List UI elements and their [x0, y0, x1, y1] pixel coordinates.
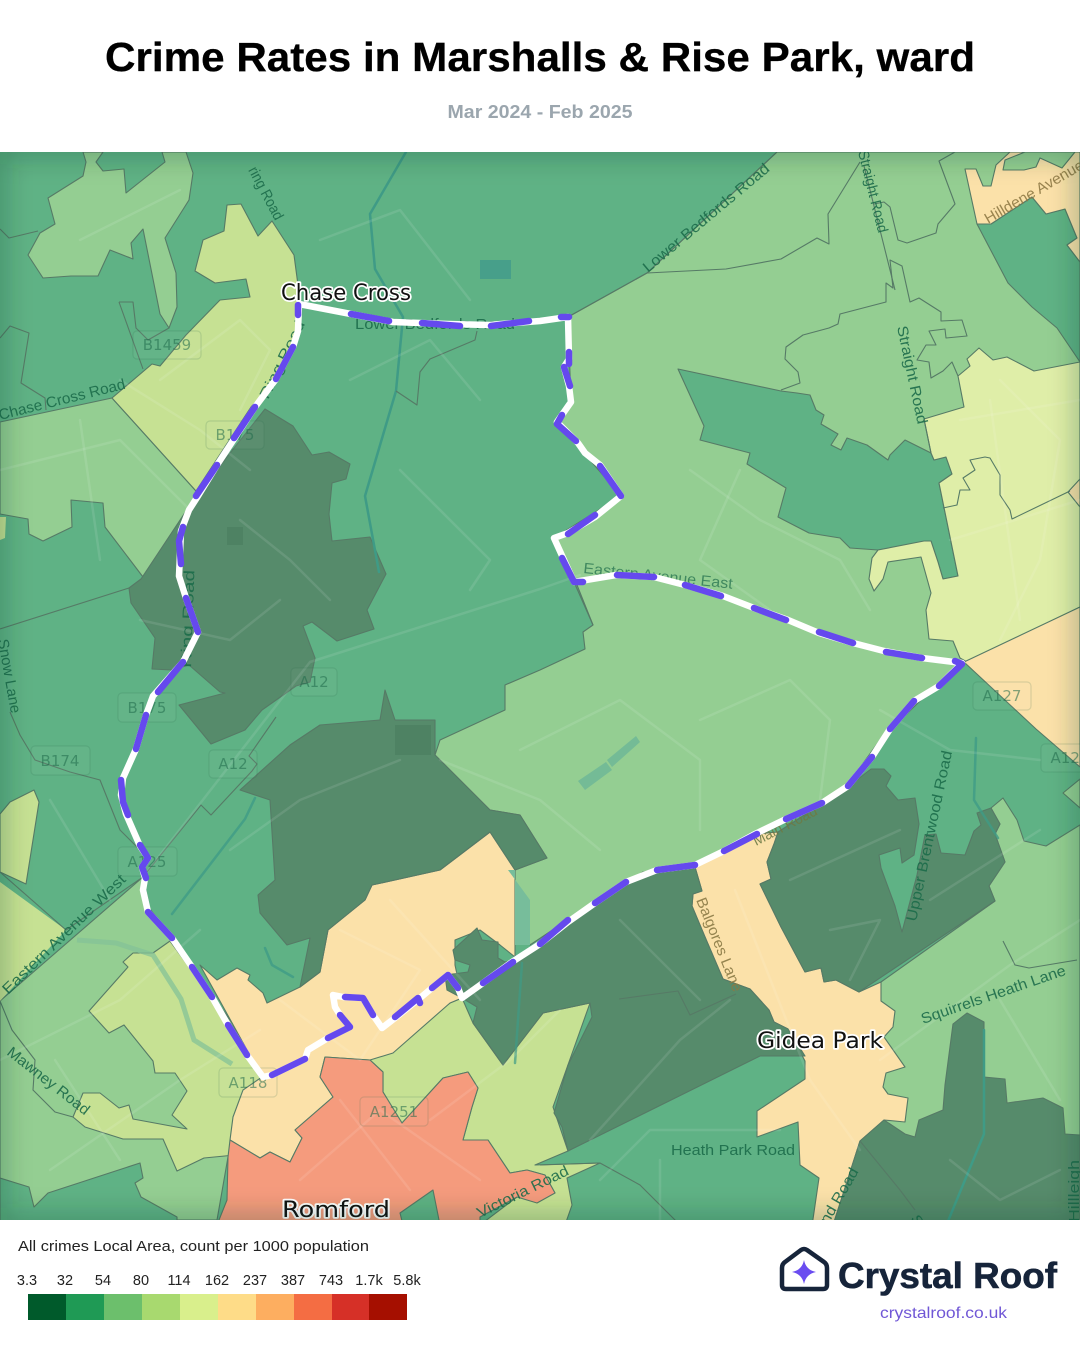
dark green areas [129, 409, 1080, 1225]
legend scale labels: 1.7k [355, 1273, 383, 1289]
light green areas [0, 152, 1080, 1220]
road shields: B174 [41, 752, 79, 770]
legend scale labels [17, 1273, 421, 1289]
ward boundary: purple dashes [121, 305, 962, 1075]
road network [0, 190, 1080, 1220]
road shields: B1459 [143, 336, 191, 354]
legend title: All crimes Local Area, count per 1000 population [18, 1239, 369, 1255]
legend scale labels: 162 [205, 1273, 229, 1289]
road shields: A1251 [370, 1103, 418, 1121]
road name labels: Eastern Avenue West [0, 870, 130, 998]
pale yellow-green areas [0, 204, 600, 1225]
legend scale labels: 743 [319, 1273, 343, 1289]
road shields: A12 [299, 673, 329, 691]
road shields: B175 [128, 699, 166, 717]
legend scale labels: 54 [95, 1273, 111, 1289]
legend colour bar [28, 1294, 407, 1320]
road shields: B175 [216, 426, 254, 444]
legend scale labels: 5.8k [393, 1273, 421, 1289]
road name labels: Straight Road [893, 324, 931, 426]
road name labels: Lower Bedfords Road [640, 160, 773, 276]
road shields [31, 331, 1080, 1126]
road shields: A127 [983, 687, 1021, 705]
road name labels: Victoria Road [474, 1162, 572, 1222]
ward boundary: white line [121, 304, 962, 1077]
road name labels: Chase Cross Road [0, 376, 127, 424]
brand logo [782, 1249, 1058, 1322]
road name labels: St [906, 1212, 930, 1237]
legend [17, 1239, 421, 1320]
map base: medium green areas [0, 152, 1080, 1220]
subtitle: Mar 2024 - Feb 2025 [448, 101, 632, 122]
water and parkland details [77, 152, 998, 1226]
icon: house with crystal star [782, 1249, 827, 1289]
legend scale labels: 387 [281, 1273, 305, 1289]
legend scale labels: 237 [243, 1273, 267, 1289]
road name labels: Straight Road [854, 149, 891, 234]
cream areas [200, 152, 1080, 1226]
wordmark: Crystal Roof [838, 1255, 1058, 1296]
road name labels: nd Road [817, 1165, 862, 1227]
area boundary lines [0, 152, 1077, 1225]
road name labels: Lower Bedfords Road [355, 316, 515, 333]
road name labels: Mawney Road [4, 1044, 93, 1119]
legend scale labels: 114 [167, 1273, 191, 1289]
road shields: A12 [218, 755, 248, 773]
pale yellow areas [869, 348, 1080, 662]
road name labels: Squirrels Heath Lane [919, 962, 1068, 1028]
place label: Gidea Park: Gidea Park [757, 1029, 883, 1054]
road name labels: Eastern Avenue East [583, 560, 734, 593]
legend scale labels: 32 [57, 1273, 73, 1289]
website: crystalroof.co.uk [880, 1305, 1008, 1322]
road name labels: Ring Road [178, 570, 198, 668]
map edge vignette [0, 146, 1080, 1226]
road name labels: Main Road [750, 803, 820, 850]
road name labels: Heath Park Road [671, 1142, 795, 1159]
road name labels: Upper Brentwood Road [903, 749, 956, 923]
road shields: A125 [128, 853, 166, 871]
road name labels: Balgores Lane [692, 895, 746, 994]
place label: Romford: Romford [282, 1198, 390, 1223]
road shields: A118 [229, 1074, 267, 1092]
legend scale labels: 80 [133, 1273, 149, 1289]
salmon high-crime area [217, 1057, 555, 1225]
legend scale labels: 3.3 [17, 1273, 37, 1289]
place label: Chase Cross: Chase Cross [281, 281, 411, 306]
road name labels: Ring Road [256, 318, 309, 402]
medium green overlays [0, 197, 1080, 1225]
road name labels: ring Road [244, 164, 287, 223]
title: Crime Rates in Marshalls & Rise Park, ward [105, 34, 975, 80]
